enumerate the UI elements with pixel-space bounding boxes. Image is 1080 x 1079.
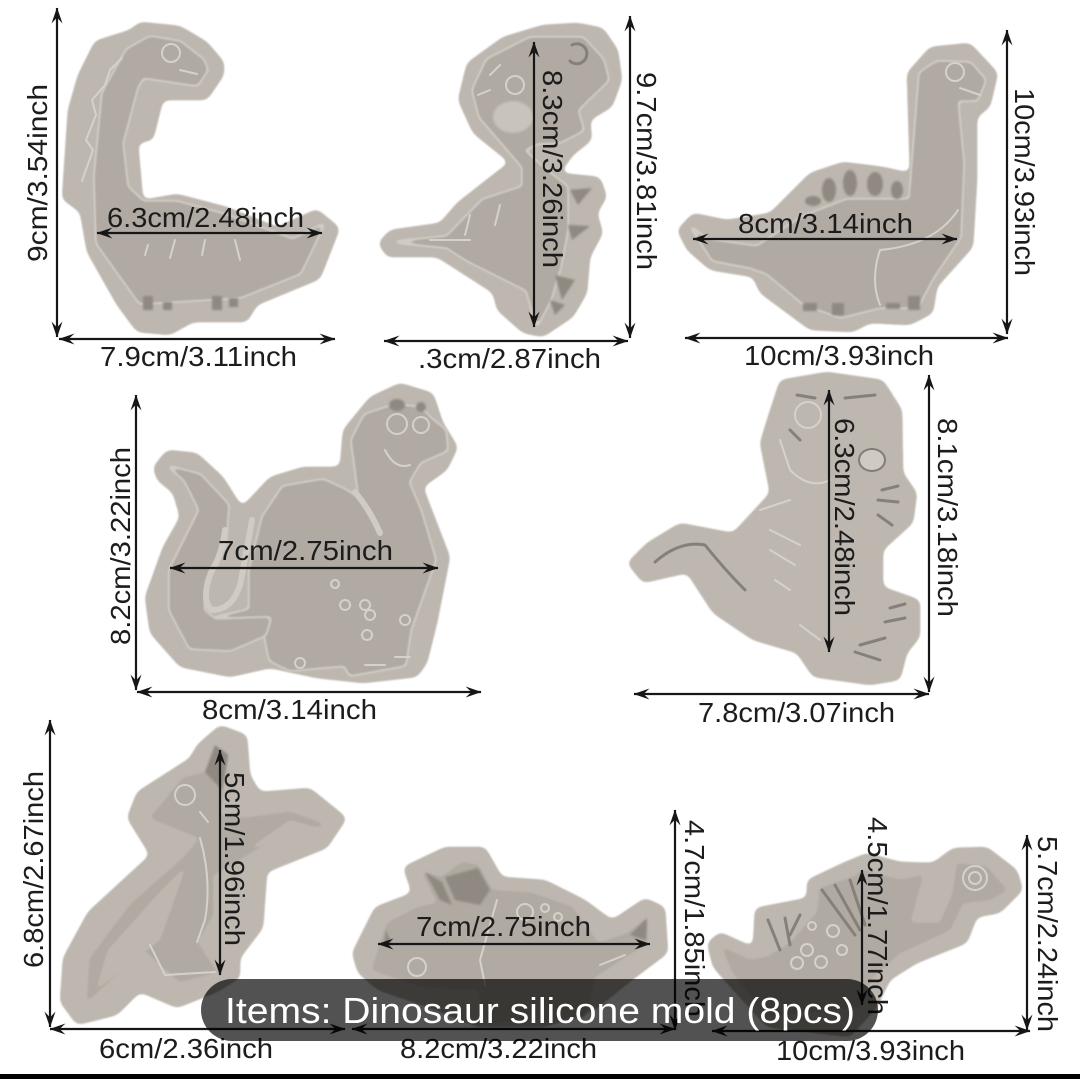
dimension labels: 4.5cm/1.77inch xyxy=(862,817,893,1015)
mold 8: winged dinosaur xyxy=(707,847,1023,1037)
dimension labels: 8.1cm/3.18inch xyxy=(932,418,963,617)
bottom black bar xyxy=(0,1074,1080,1079)
mold 5: striped t-rex xyxy=(627,372,920,685)
dimension labels: 8cm/3.14inch xyxy=(738,208,913,239)
dimension labels: 7cm/2.75inch xyxy=(416,911,591,942)
dimension labels: 6.8cm/2.67inch xyxy=(18,771,49,968)
mold 1: long-neck dinosaur xyxy=(62,22,340,335)
dimension labels: 8.3cm/3.26inch xyxy=(537,70,568,268)
mold 3: long-neck dinosaur with plates xyxy=(677,43,998,332)
dimension labels: 7cm/2.75inch xyxy=(218,535,393,566)
dimension labels: 8.2cm/3.22inch xyxy=(105,447,136,645)
dimension labels: 7.8cm/3.07inch xyxy=(698,697,895,728)
mold 4: smiling brontosaurus xyxy=(145,383,458,683)
mold 2: t-rex with leaves xyxy=(378,23,622,337)
snout patch xyxy=(493,101,533,133)
dimension labels: 6.3cm/2.48inch xyxy=(829,418,860,616)
wing highlight xyxy=(96,820,325,990)
dimension labels: 5.7cm/2.24inch xyxy=(1032,836,1063,1032)
dimension labels: 4.7cm/1.85inch xyxy=(679,820,710,1017)
caption pill: Items: Dinosaur silicone mold (8pcs) xyxy=(225,990,855,1031)
dimension labels: 9cm/3.54inch xyxy=(22,84,53,262)
mold 7: frilled dinosaur xyxy=(352,847,668,1027)
dimension labels: 6.3cm/2.48inch xyxy=(107,202,304,233)
dimension labels: 6cm/2.36inch xyxy=(99,1033,273,1064)
dimension labels: 8.2cm/3.22inch xyxy=(400,1033,597,1064)
dimension labels: .3cm/2.87inch xyxy=(418,343,601,374)
dimension labels: 8cm/3.14inch xyxy=(202,694,377,725)
dimension labels: 10cm/3.93inch xyxy=(1009,88,1040,276)
dimension labels: 9.7cm/3.81inch xyxy=(631,72,662,270)
caption pill xyxy=(201,979,878,1041)
mold 6: pterosaur xyxy=(60,725,347,1025)
dimension labels: 10cm/3.93inch xyxy=(744,340,934,371)
dimension labels: 10cm/3.93inch xyxy=(776,1035,965,1066)
dimension labels: 7.9cm/3.11inch xyxy=(100,341,297,372)
dimension labels: 5cm/1.96inch xyxy=(219,772,250,946)
